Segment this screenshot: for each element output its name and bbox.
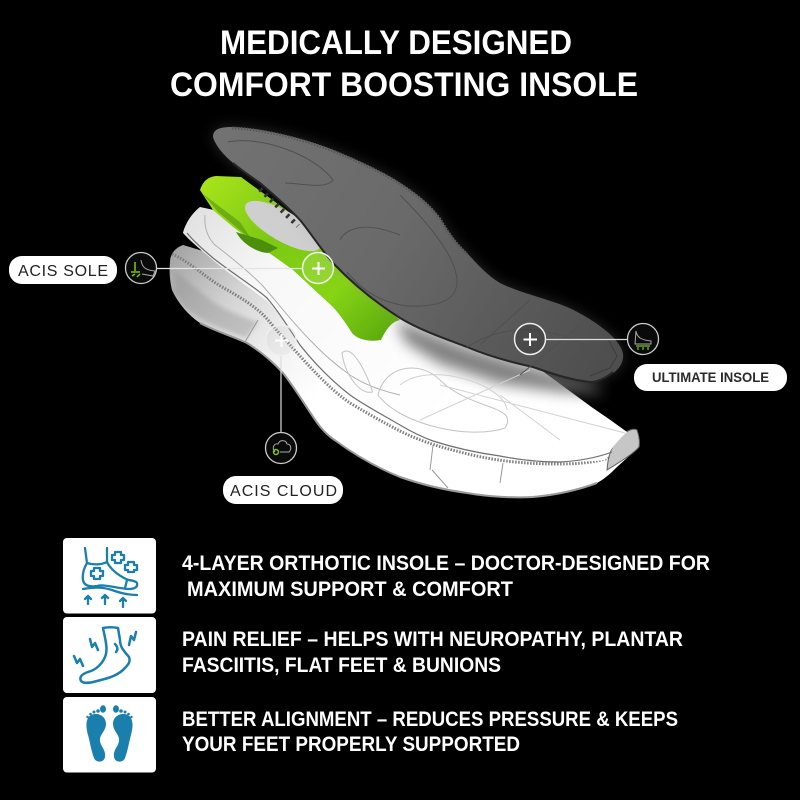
plus marker: [266, 325, 296, 355]
insole cast shadow: [396, 320, 606, 394]
green arch support: [200, 176, 400, 341]
icon: footprints: [63, 697, 156, 772]
exploded insole illustration: [170, 127, 639, 497]
feature text: YOUR FEET PROPERLY SUPPORTED: [182, 733, 520, 756]
callout: ultimate insole: [514, 324, 787, 391]
label pill: [634, 364, 787, 391]
icon: acis sole: [126, 252, 156, 284]
label pill: ACIS SOLE: [18, 263, 108, 280]
feature text: [182, 552, 710, 601]
feature text: FASCIITIS, FLAT FEET & BUNIONS: [182, 654, 501, 677]
plus marker: [302, 252, 334, 284]
title: COMFORT BOOSTING INSOLE: [170, 66, 638, 104]
icon: ultimate insole: [628, 324, 658, 354]
title: MEDICALLY DESIGNED: [220, 24, 572, 62]
feature text: [182, 628, 683, 677]
upper layer: [183, 207, 627, 462]
icon: acis cloud: [266, 432, 296, 464]
plus marker: [514, 324, 546, 354]
feature row: 4-layer orthotic insole: [63, 538, 710, 614]
title: [170, 24, 638, 104]
feature row: better alignment: [63, 697, 678, 772]
hatched seam between layers: [172, 254, 618, 464]
toe cap: [607, 429, 639, 470]
label pill: [223, 476, 343, 504]
icon: foot with crosses and arrows: [63, 538, 156, 614]
icon: foot with pain bolts: [63, 617, 156, 693]
label pill: ULTIMATE INSOLE: [652, 370, 769, 385]
callout: acis sole: [9, 252, 334, 284]
lower layer: acis cloud: [170, 245, 639, 497]
feature text: BETTER ALIGNMENT – REDUCES PRESSURE & KEEPS: [182, 708, 678, 731]
label pill: [9, 256, 117, 284]
label pill: ACIS CLOUD: [230, 483, 337, 500]
feature text: PAIN RELIEF – HELPS WITH NEUROPATHY, PLANTAR: [182, 628, 683, 651]
feature text: [182, 708, 678, 756]
callout: acis cloud: [223, 325, 343, 504]
arch cut-out: [238, 192, 328, 260]
feature text: 4-LAYER ORTHOTIC INSOLE – DOCTOR-DESIGNED FOR: [182, 552, 710, 575]
feature text: MAXIMUM SUPPORT & COMFORT: [187, 578, 513, 601]
feature row: pain relief: [63, 617, 683, 693]
top layer: ultimate insole: [213, 127, 623, 382]
